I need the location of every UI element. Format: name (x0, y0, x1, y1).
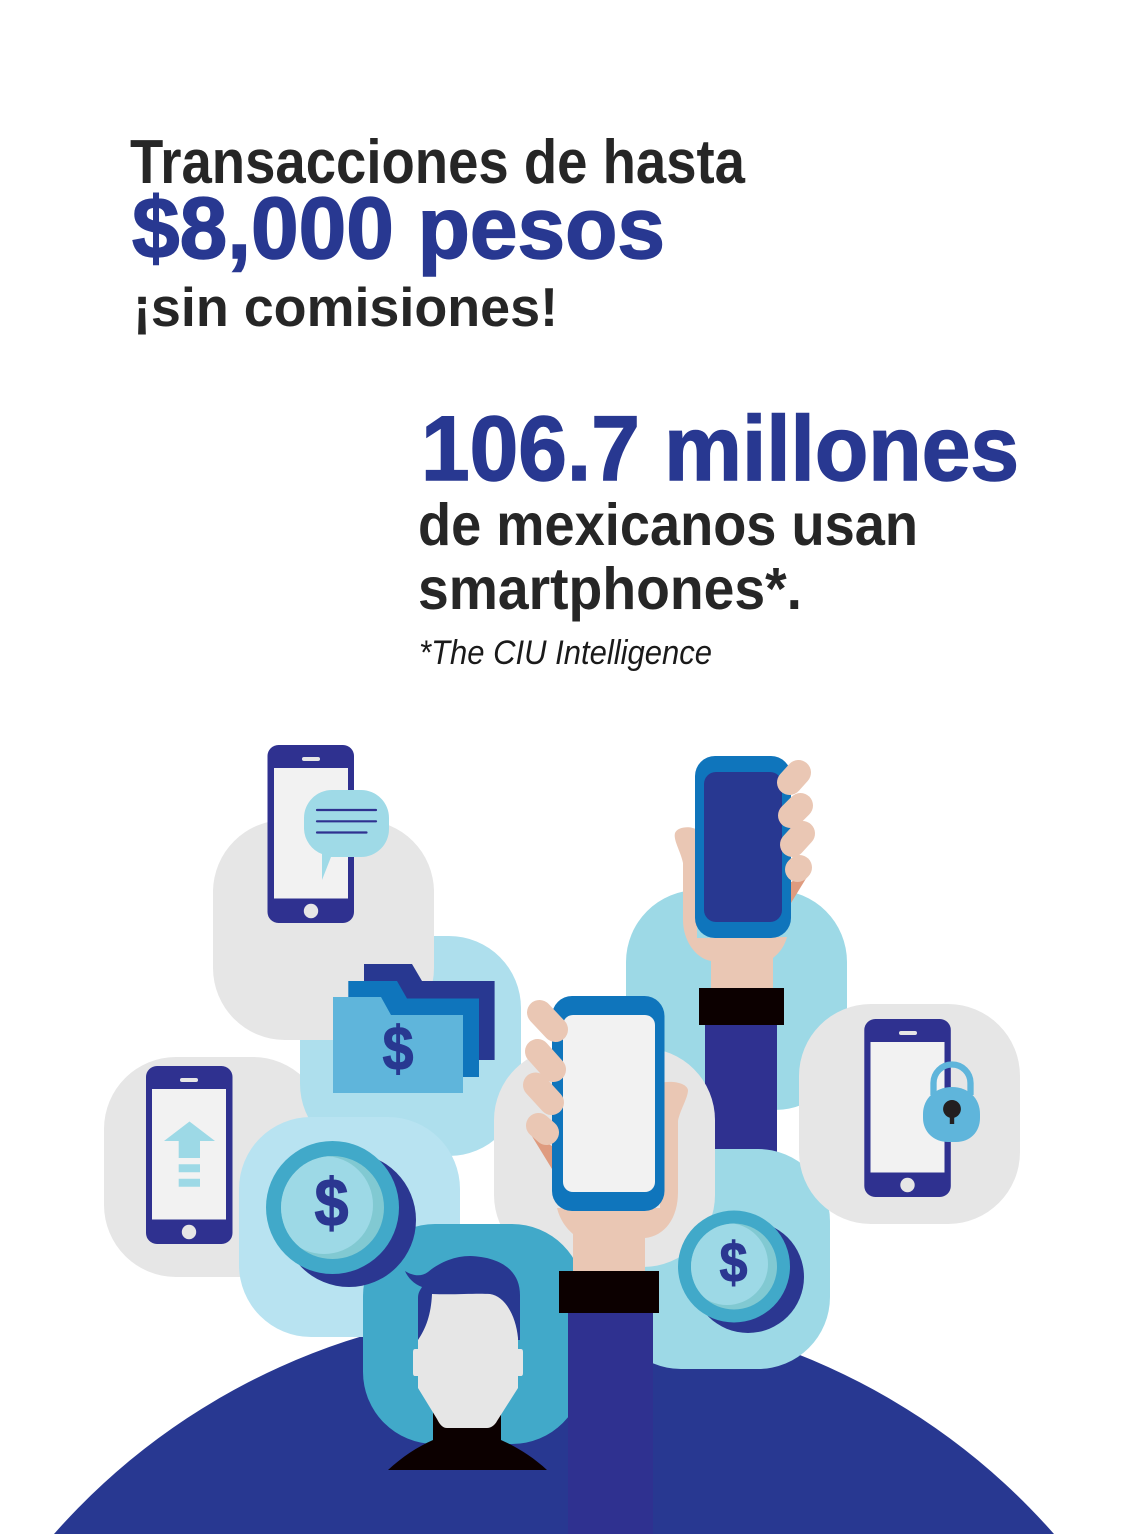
back folder (364, 964, 495, 1060)
blob: gray top (213, 820, 434, 1040)
hair (405, 1256, 520, 1340)
chat text lines (317, 810, 376, 832)
chat bubble (304, 790, 389, 880)
blob: pale coin background (239, 1117, 460, 1337)
coin face shade (691, 1224, 777, 1310)
coin face shade (281, 1156, 384, 1259)
person: head silhouette (388, 1256, 547, 1470)
heading: transactions headline (130, 128, 745, 338)
face (413, 1294, 523, 1428)
coin rim (678, 1210, 790, 1322)
phone screen (870, 1042, 944, 1172)
coin shadow (692, 1221, 804, 1333)
icon: phone with padlock (864, 1019, 980, 1197)
phone body (268, 745, 354, 923)
statistic: smartphone users (418, 398, 1019, 672)
blob: teal behind head (363, 1224, 584, 1444)
wrist band (699, 988, 784, 1025)
front folder (333, 997, 463, 1093)
phone speaker (302, 757, 320, 761)
finger shadow (791, 872, 810, 903)
phone speaker (180, 1078, 198, 1082)
phone body (146, 1066, 232, 1244)
padlock body (923, 1087, 980, 1142)
heading amount: $8,000 pesos: $8,000 pesos (132, 180, 665, 277)
blob: blue lower right (609, 1149, 830, 1369)
phone body (552, 996, 664, 1211)
fingers (536, 1012, 556, 1132)
sleeve (568, 1313, 653, 1534)
blob: gray center (494, 1048, 715, 1267)
big number: 106.7 millones: 106.7 millones (421, 398, 1019, 500)
blob: blue upper right (626, 890, 847, 1110)
finger shadow (530, 1133, 552, 1169)
icon: stacked money folders (333, 964, 495, 1093)
heading line: Transacciones de hasta: Transacciones de hasta (130, 128, 745, 197)
phone home button (182, 1225, 196, 1239)
icon: phone with upload arrow (146, 1066, 232, 1244)
phone screen (274, 768, 348, 898)
dollar sign: $ (382, 1015, 414, 1084)
raised arm: right hand with phone (675, 756, 810, 1155)
dollar sign: $ (314, 1165, 348, 1241)
phone screen (152, 1089, 226, 1220)
coin rim (266, 1141, 399, 1274)
heading line: sin comisiones: ¡sin comisiones! (133, 276, 558, 338)
fingers (790, 772, 802, 870)
coin face (686, 1223, 768, 1305)
hand palm and thumb (675, 827, 787, 990)
sleeve (705, 1025, 777, 1155)
blob: folder background (300, 936, 521, 1156)
upload arrow (164, 1122, 215, 1158)
blob: gray left (104, 1057, 325, 1277)
globe: navy hemisphere (54, 1308, 1054, 1534)
phone body (695, 756, 791, 938)
wrist band (559, 1271, 659, 1313)
middle folder (348, 981, 479, 1077)
text: smartphones: smartphones*. (418, 556, 802, 622)
hand palm and thumb (557, 1082, 688, 1273)
coin face (275, 1156, 373, 1254)
phone home button (900, 1178, 915, 1192)
coin shadow (282, 1153, 416, 1287)
keyhole (943, 1100, 961, 1124)
text: de mexicanos usan: de mexicanos usan (418, 492, 918, 558)
phone home button (304, 904, 318, 918)
phone screen (563, 1015, 655, 1192)
padlock shackle (934, 1064, 970, 1095)
phone screen (704, 772, 782, 922)
arrow bars (179, 1164, 200, 1187)
icon: right coin (678, 1210, 804, 1333)
icon: left coin (266, 1141, 416, 1287)
phone body (864, 1019, 951, 1197)
source note: *The CIU Intelligence (419, 634, 712, 672)
phone speaker (899, 1031, 917, 1035)
icon: phone with chat bubble (268, 745, 389, 923)
blob: gray right (799, 1004, 1020, 1224)
shoulders and neck (388, 1405, 547, 1470)
raised arm: center hand with phone (530, 996, 688, 1534)
dollar sign: $ (720, 1231, 748, 1295)
